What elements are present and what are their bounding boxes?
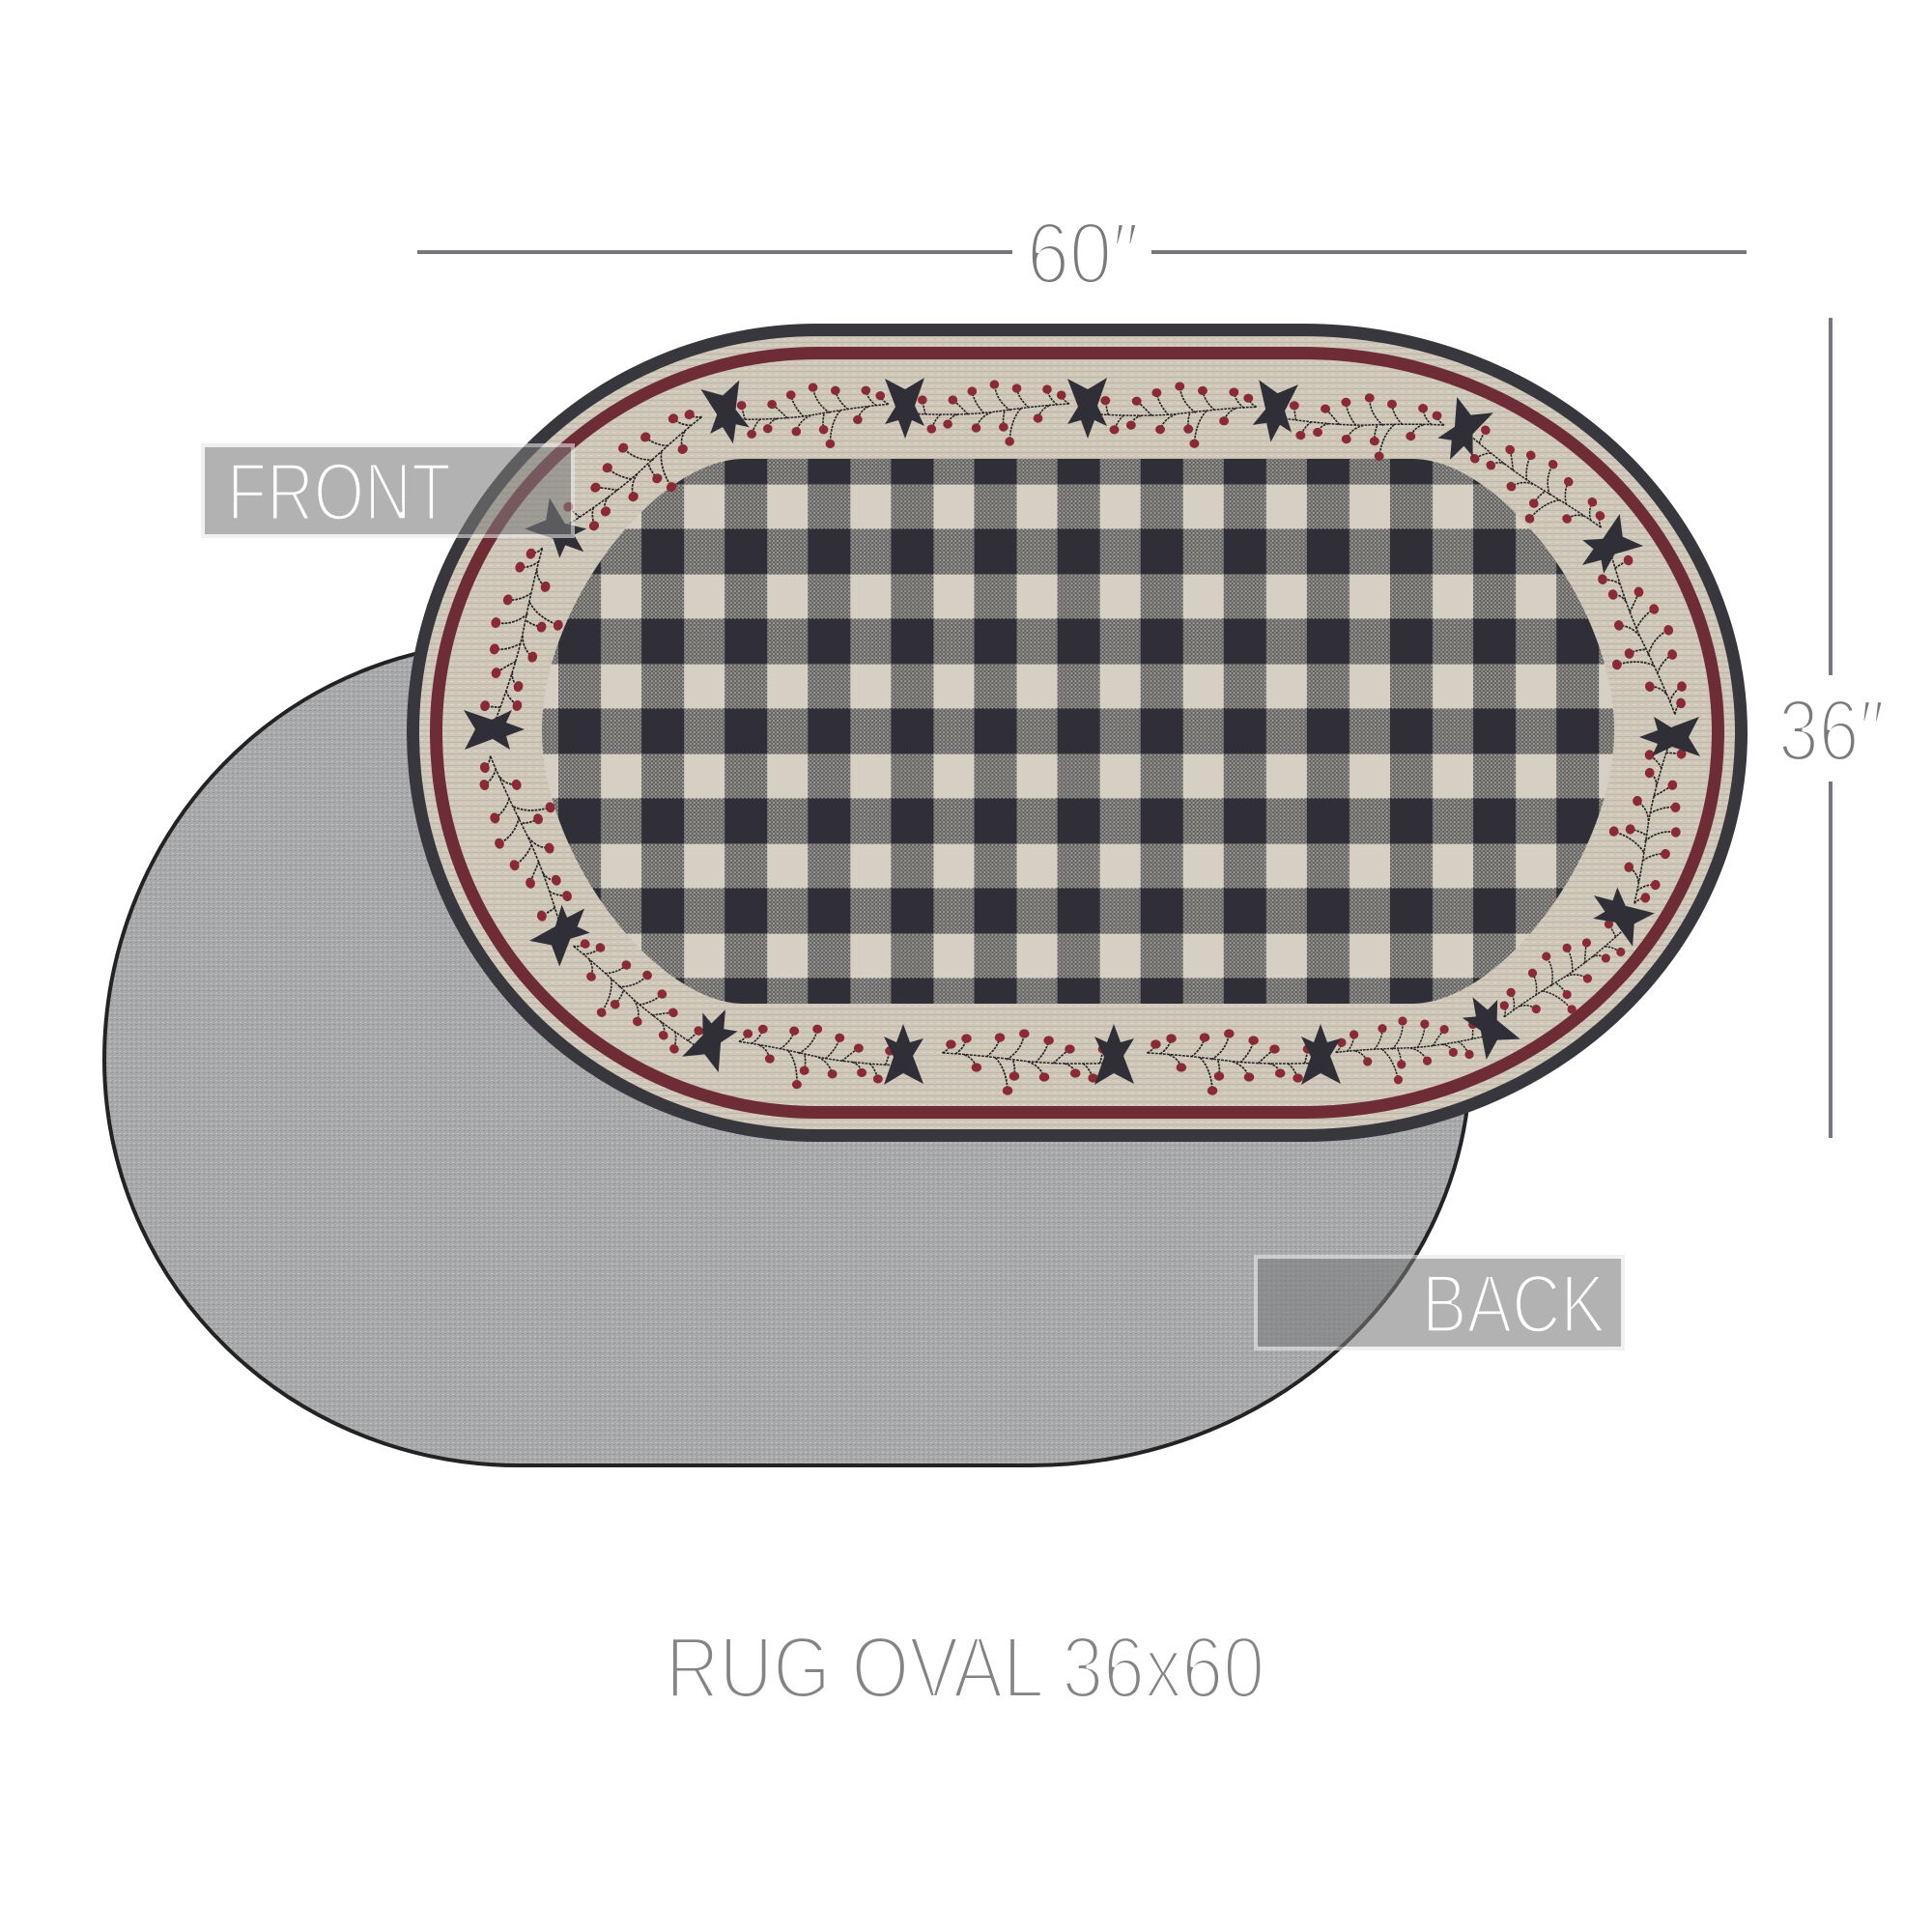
- label: BACK: BACK: [1422, 1259, 1605, 1350]
- label: BACK: [1256, 1257, 1623, 1350]
- cream outer band: [419, 336, 1735, 1129]
- dimension line: height: [1829, 318, 1833, 1138]
- dimension label: 60 inches: 60″: [1027, 206, 1139, 302]
- caption: RUG OVAL 36x60: [666, 1620, 1264, 1717]
- dimension label: 36 inches: 36″: [1778, 683, 1885, 780]
- cream star border: [442, 359, 1712, 1106]
- front of rug: [407, 324, 1747, 1142]
- buffalo check centre: [522, 444, 1634, 1024]
- burgundy stripe: [430, 347, 1724, 1119]
- dimension line: width: [417, 250, 1747, 254]
- berry vines: [460, 380, 1706, 1098]
- outer dark binding: [407, 324, 1747, 1142]
- primitive stars: [464, 378, 1700, 1085]
- back of rug: [104, 642, 1470, 1465]
- label: FRONT: FRONT: [227, 446, 451, 537]
